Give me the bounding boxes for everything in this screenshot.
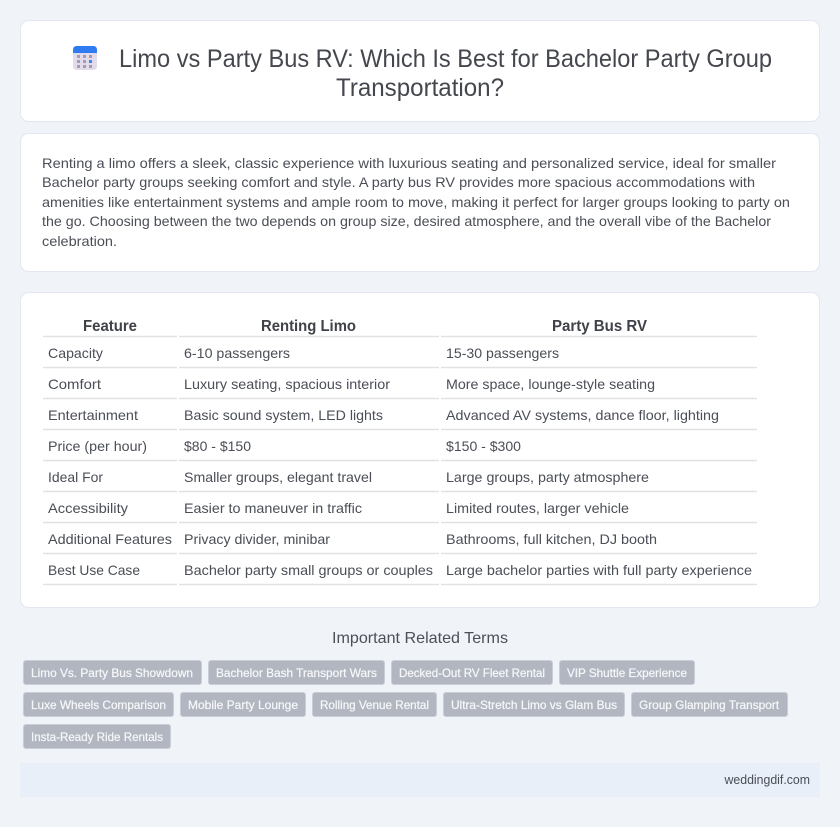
- row: best use case: Large bachelor parties with full party experience: [446, 562, 752, 578]
- row: comfort: [48, 376, 655, 392]
- row: additional features: Bathrooms, full kitchen, DJ booth: [446, 531, 657, 547]
- table header row: Party Bus RV: [552, 318, 647, 335]
- panel: introduction text: celebration.: [42, 233, 117, 249]
- panel: introduction text: Bachelor party groups seeking comfort and style. A party bus RV provides more spacious accommodations with: [42, 174, 755, 190]
- row: price: [48, 438, 521, 454]
- row: accessibility: [48, 500, 629, 516]
- row: price: $80 - $150: [184, 438, 251, 454]
- row: best use case: Best Use Case: [48, 562, 140, 578]
- row: additional features: [48, 531, 657, 547]
- row: additional features: Privacy divider, minibar: [184, 531, 330, 547]
- title: Limo vs Party Bus RV: Which Is Best for Bachelor Party Group: [119, 45, 772, 73]
- row: ideal for: Ideal For: [48, 469, 103, 485]
- row: entertainment: Entertainment: [48, 407, 138, 423]
- panel: related term tags: Insta-Ready Ride Rentals: [31, 730, 163, 744]
- table header row: [83, 318, 647, 335]
- panel: introduction text: Renting a limo offers a sleek, classic experience with luxurious seating and personalized service, ideal for smaller: [42, 155, 776, 171]
- row: comfort: Comfort: [48, 376, 101, 392]
- panel: related term tags: Limo Vs. Party Bus Showdown: [31, 666, 193, 680]
- heading: related terms: Important Related Terms: [332, 630, 508, 647]
- row: ideal for: Smaller groups, elegant travel: [184, 469, 372, 485]
- row: best use case: [48, 562, 752, 578]
- row: entertainment: Basic sound system, LED lights: [184, 407, 383, 423]
- panel: related term tags: VIP Shuttle Experience: [567, 666, 687, 680]
- panel: related term tags: Bachelor Bash Transport Wars: [216, 666, 377, 680]
- row: best use case: Bachelor party small groups or couples: [184, 562, 433, 578]
- row: capacity: [48, 345, 559, 361]
- row: comfort: More space, lounge-style seating: [446, 376, 655, 392]
- row: additional features: Additional Features: [48, 531, 172, 547]
- row: ideal for: Large groups, party atmosphere: [446, 469, 649, 485]
- title: [119, 45, 772, 102]
- panel: introduction text: the go. Choosing between the two depends on group size, desired atmosphere, and the overall vibe of the Bachelor: [42, 213, 771, 229]
- footer: weddingdif.com: [724, 772, 810, 787]
- row: accessibility: Easier to maneuver in traffic: [184, 500, 362, 516]
- panel: title header: [20, 20, 820, 122]
- row: capacity: Capacity: [48, 345, 103, 361]
- row: comfort: Luxury seating, spacious interior: [184, 376, 390, 392]
- panel: introduction text: amenities like entertainment systems and ample room to move, making it perfect for larger groups looking to party on: [42, 194, 790, 210]
- panel: related term tags: Rolling Venue Rental: [320, 698, 429, 712]
- table header row: Feature: [83, 318, 137, 335]
- panel: related term tags: Decked-Out RV Fleet Rental: [399, 666, 545, 680]
- row: price: $150 - $300: [446, 438, 521, 454]
- row: accessibility: Limited routes, larger vehicle: [446, 500, 629, 516]
- row: entertainment: [48, 407, 719, 423]
- row: accessibility: Accessibility: [48, 500, 128, 516]
- panel: related term tags: Luxe Wheels Comparison: [31, 698, 166, 712]
- panel: comparison table: [20, 292, 820, 608]
- footer: [20, 763, 820, 797]
- row: ideal for: [48, 469, 649, 485]
- panel: related term tags: Mobile Party Lounge: [188, 698, 298, 712]
- row: entertainment: Advanced AV systems, dance floor, lighting: [446, 407, 719, 423]
- icon: calendar: [73, 46, 97, 70]
- panel: related term tags: [24, 660, 788, 748]
- table header row: Renting Limo: [261, 318, 356, 335]
- row: price: Price (per hour): [48, 438, 147, 454]
- row: capacity: 15-30 passengers: [446, 345, 559, 361]
- panel: introduction text: [20, 134, 820, 272]
- row: capacity: 6-10 passengers: [184, 345, 290, 361]
- panel: related term tags: Group Glamping Transport: [639, 698, 780, 712]
- title: Transportation?: [336, 74, 504, 102]
- panel: related term tags: Ultra-Stretch Limo vs Glam Bus: [451, 698, 617, 712]
